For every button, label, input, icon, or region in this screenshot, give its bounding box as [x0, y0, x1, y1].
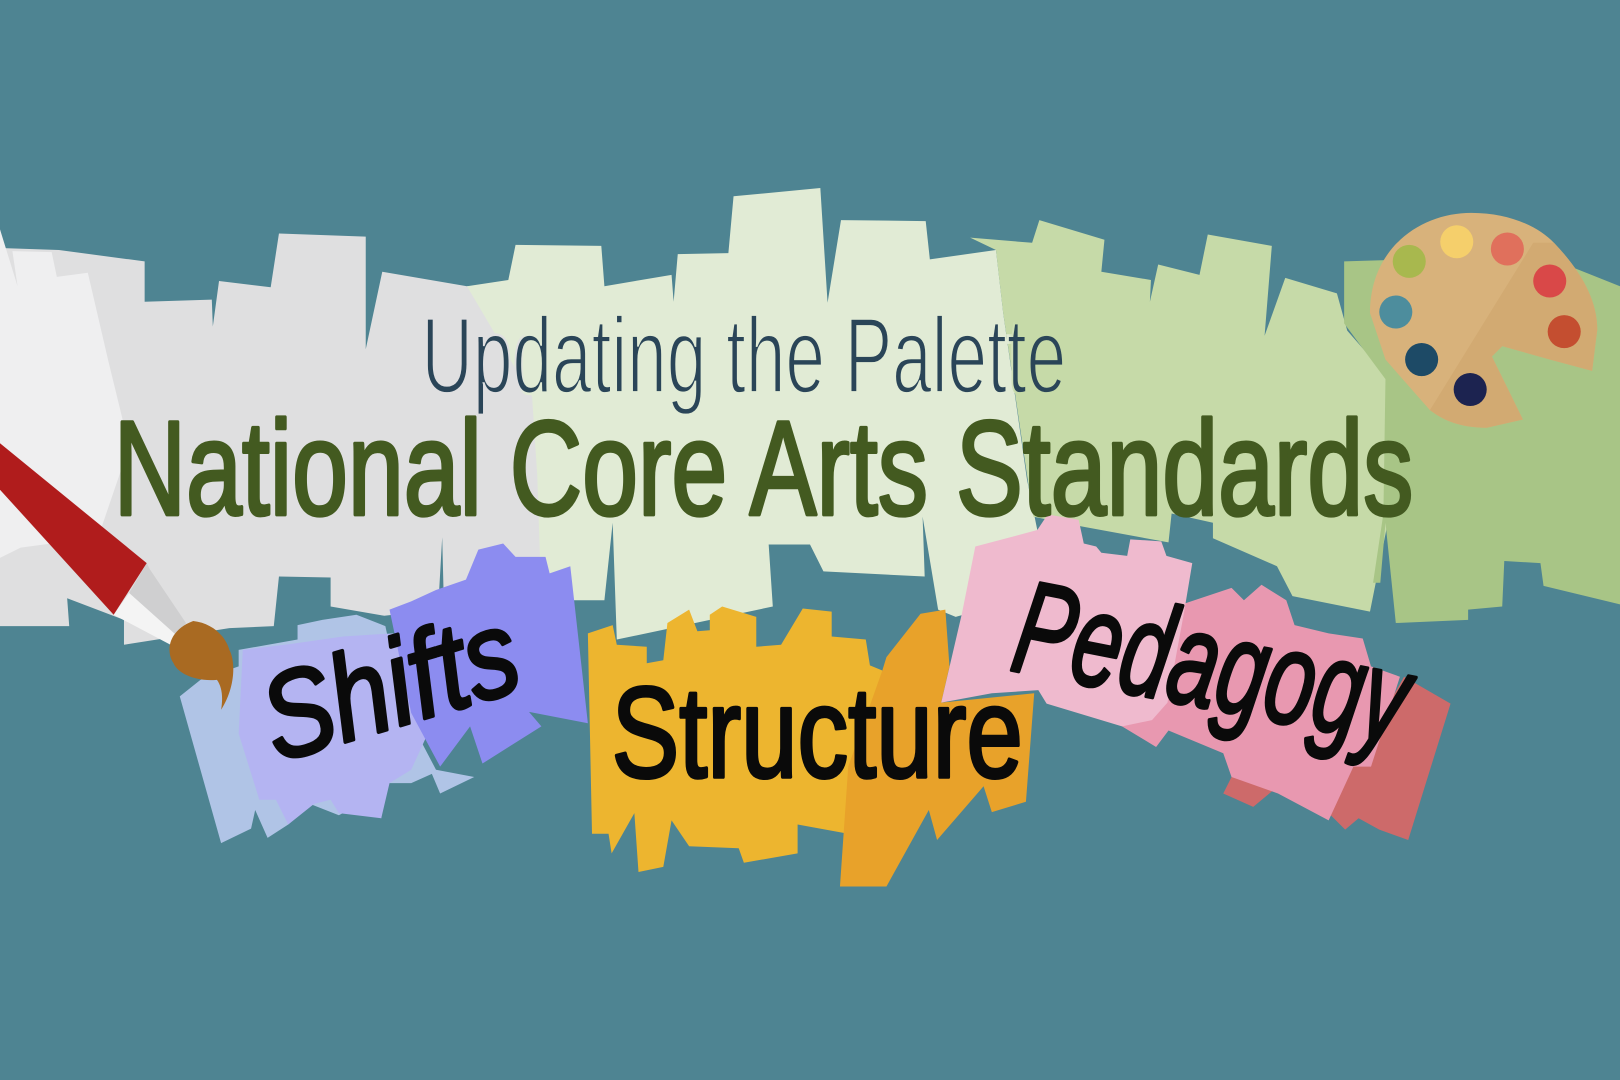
palette shaded half — [1430, 243, 1597, 428]
orange layer — [840, 610, 1034, 886]
red layer — [1329, 677, 1451, 840]
lavender layer — [239, 633, 428, 824]
gray paint swath — [0, 234, 558, 645]
darker green paint swath — [1344, 258, 1620, 623]
icon: paint palette — [1370, 213, 1597, 428]
light pink layer — [941, 515, 1192, 726]
panel: Pedagogy paint patch — [941, 515, 1451, 840]
palette board — [1370, 213, 1597, 428]
paint dot: burnt orange — [1548, 315, 1581, 348]
green paint swath — [970, 220, 1390, 612]
paint dot: teal — [1379, 295, 1412, 329]
light gray paint swath — [0, 229, 129, 558]
periwinkle layer — [390, 543, 588, 767]
brush tip — [169, 621, 233, 710]
paint dot: yellow — [1440, 225, 1473, 258]
paint dot: olive — [1393, 245, 1426, 278]
paint dot: salmon — [1491, 232, 1524, 266]
paint dot: red — [1533, 264, 1566, 298]
label: Structure: Structure — [612, 661, 1023, 805]
panel: Shifts paint patch — [180, 543, 588, 843]
icon: paintbrush — [0, 443, 233, 710]
paint dot: dark teal — [1405, 343, 1438, 376]
yellow layer — [588, 606, 889, 872]
panel: Structure paint patch — [588, 606, 1034, 886]
mid pink layer — [1122, 585, 1400, 820]
pale green paint swath — [467, 188, 1037, 640]
brush ferrule shadow — [129, 563, 186, 636]
label: Shifts: Shifts — [245, 583, 534, 787]
paint dot: navy — [1454, 373, 1487, 406]
pale blue layer — [180, 615, 474, 843]
brush ferrule — [114, 593, 178, 645]
brush handle — [0, 443, 147, 615]
panel: paint band — [0, 188, 1620, 645]
title: Updating the Palette: Updating the Palette — [422, 296, 1066, 416]
label: Pedagogy: Pedagogy — [1003, 553, 1426, 775]
small red layer — [1223, 765, 1278, 807]
